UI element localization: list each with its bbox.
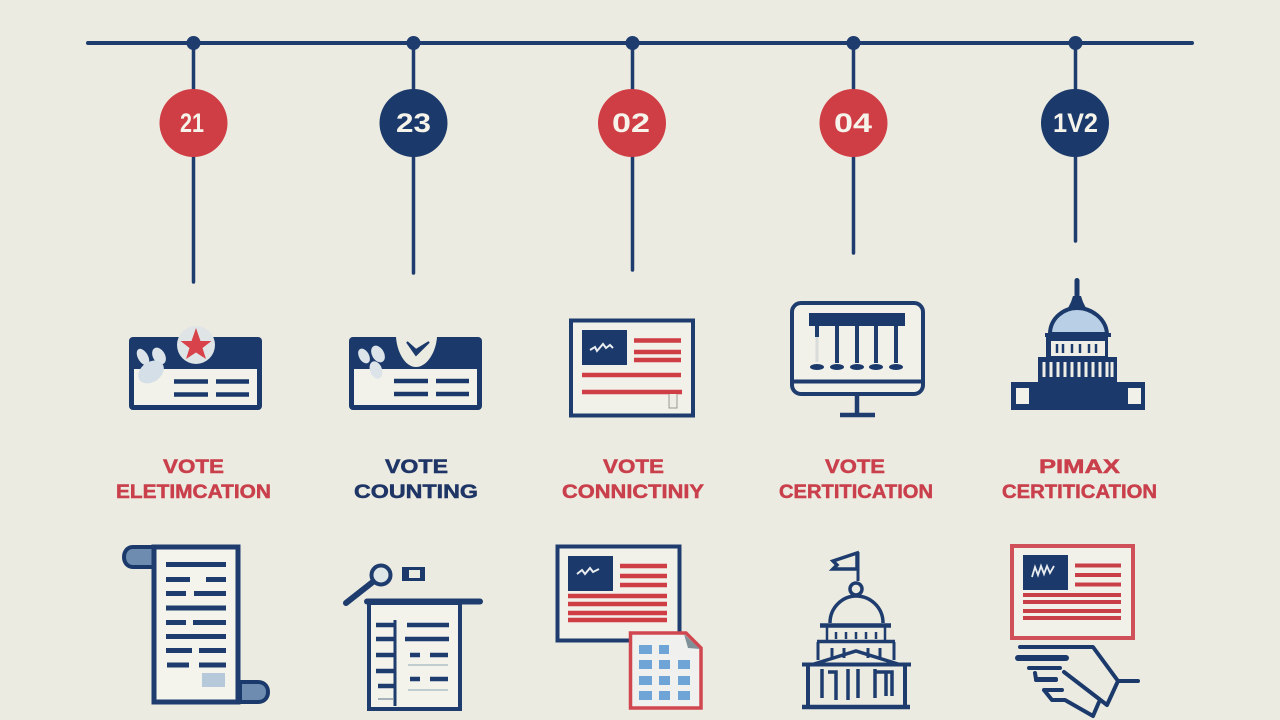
label: pimax certitication: CERTITICATION (1002, 482, 1157, 503)
label: vote counting: VOTE (385, 457, 448, 478)
badge 1V2: 1V2 (1053, 108, 1098, 138)
label: vote counting (354, 457, 478, 503)
icon: capitol building solid (1011, 278, 1145, 410)
label: vote certitication: CERTITICATION (779, 482, 933, 503)
label: vote connictiniy: CONNICTINIY (562, 482, 704, 503)
label: vote connictiniy (562, 457, 704, 503)
label: vote eletimcation: ELETIMCATION (116, 482, 271, 503)
icon: flag card with data sheet (558, 546, 701, 708)
icon: ID card with star (129, 326, 262, 410)
badge 1V2 (1041, 89, 1109, 157)
badge 02: 02 (612, 108, 650, 138)
icon: flag card held by hand (1012, 546, 1138, 716)
label: vote certitication: VOTE (825, 457, 885, 478)
badge 23: 23 (396, 108, 431, 138)
badge 02 (598, 89, 666, 157)
label: vote connictiniy: VOTE (603, 457, 664, 478)
timeline axis with nodes and stems (88, 36, 1192, 282)
label: vote eletimcation (116, 457, 271, 503)
badge 04 (820, 89, 888, 157)
badge 23 (380, 89, 448, 157)
label: pimax certitication (1002, 457, 1157, 503)
label: vote certitication (779, 457, 933, 503)
badge 21: 21 (180, 108, 204, 138)
date badges (160, 89, 1109, 157)
label: vote eletimcation: VOTE (163, 457, 224, 478)
label: vote counting: COUNTING (354, 482, 478, 503)
icon: monitor with columns (792, 303, 923, 415)
icon: capitol building outline (802, 552, 911, 707)
badge 04: 04 (834, 108, 872, 138)
icon: ID card with check (349, 337, 482, 410)
label: pimax certitication: PIMAX (1039, 457, 1120, 478)
icon: scroll document (124, 547, 268, 702)
icon: magnifier and clipboard (346, 566, 480, 709)
icon: flag card (571, 320, 693, 416)
badge 21 (160, 89, 228, 157)
